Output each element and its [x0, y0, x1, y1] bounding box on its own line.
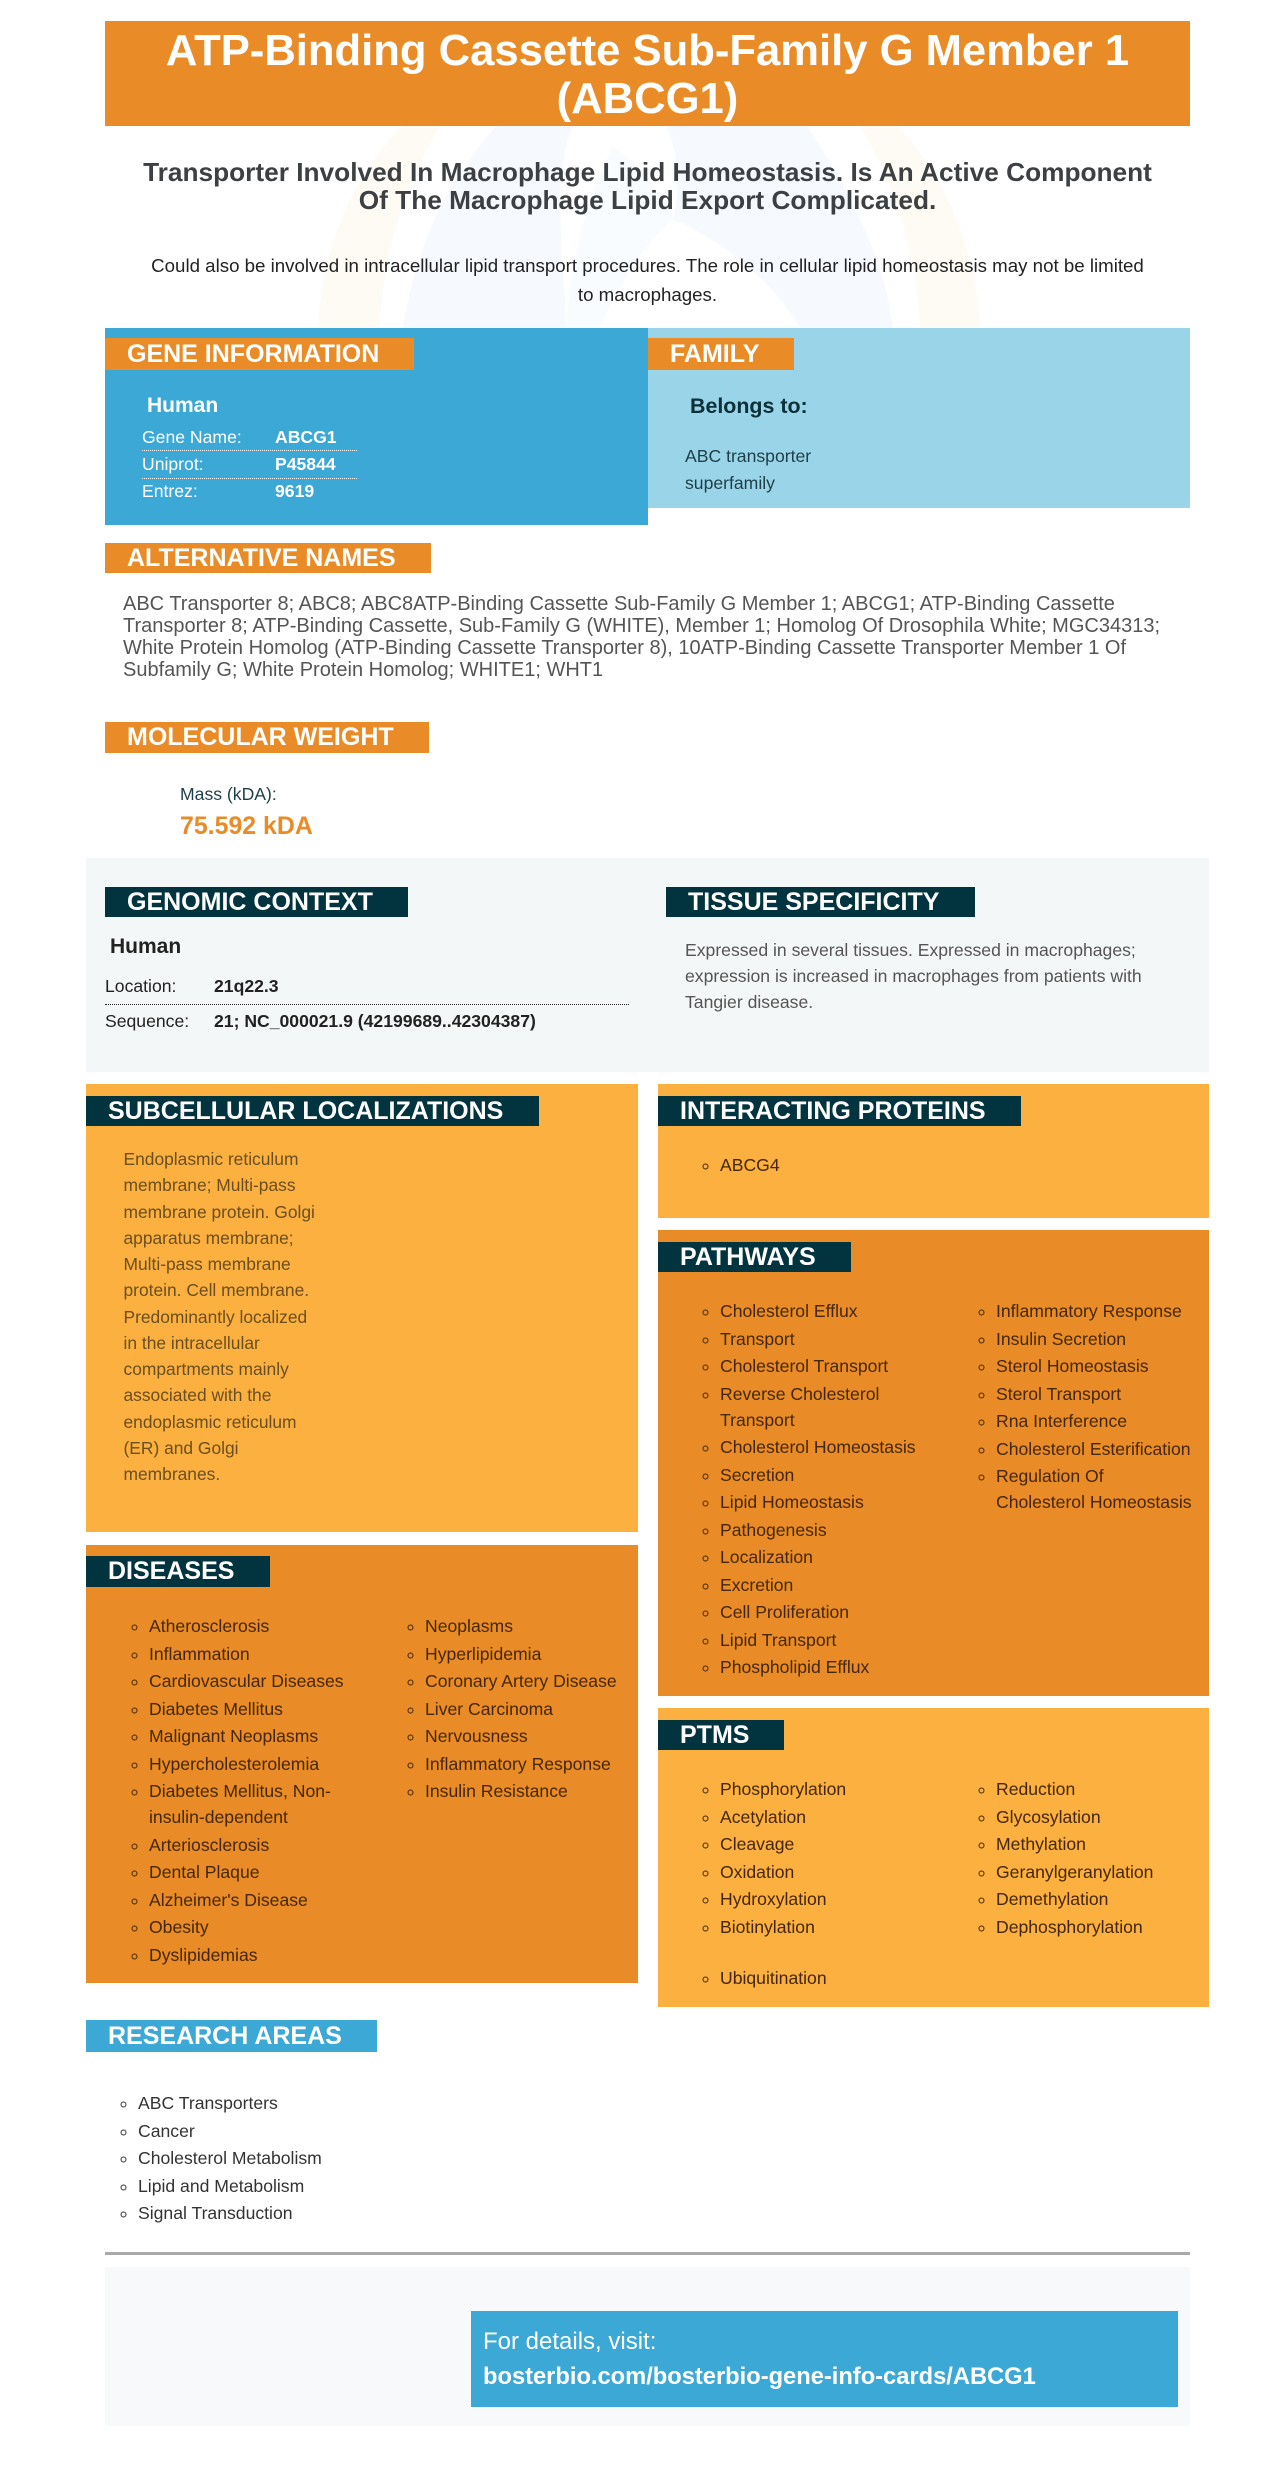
subcellular text: Endoplasmic reticulum — [124, 1149, 298, 1169]
heading: interacting proteins: INTERACTING PROTEINS — [680, 1097, 986, 1125]
gene table: Uniprot: — [142, 454, 204, 474]
heading: diseases — [86, 1556, 270, 1587]
ptms list column 1: Ubiquitination — [720, 1968, 827, 1988]
pathways list column 2: Sterol Transport — [996, 1384, 1121, 1404]
ptms list column 1: Hydroxylation — [720, 1889, 827, 1909]
pathways list column 1: Cholesterol Efflux — [720, 1301, 858, 1321]
heading: pathways — [658, 1242, 851, 1272]
pathways list column 1: Lipid Homeostasis — [720, 1492, 864, 1512]
ptms list column 2: Demethylation — [996, 1889, 1108, 1909]
ptms list column 1: Biotinylation — [720, 1916, 815, 1936]
research areas list: Lipid and Metabolism — [138, 2176, 304, 2196]
heading: research areas: RESEARCH AREAS — [108, 2022, 342, 2050]
ptms list column 1: Phosphorylation — [720, 1779, 846, 1799]
watermark logo — [318, 126, 980, 328]
diseases list column 1: Alzheimer's Disease — [149, 1890, 308, 1910]
species: Human — [110, 935, 181, 958]
subtitle: Transporter Involved In Macrophage Lipid Homeostasis. Is An Active Component — [143, 157, 1152, 187]
subcellular text: protein. Cell membrane. — [124, 1280, 309, 1300]
panel: genomic context and tissue specificity — [86, 858, 1209, 1072]
pathways list column 1: Cholesterol Homeostasis — [720, 1437, 916, 1457]
ptms list column 1: Oxidation — [720, 1862, 794, 1882]
family value — [685, 446, 811, 493]
panel: interacting proteins — [658, 1084, 1209, 1218]
pathways list column 1: Cell Proliferation — [720, 1602, 849, 1622]
pathways list column 2: Inflammatory Response — [996, 1301, 1182, 1321]
interacting list: ABCG4 — [720, 1155, 780, 1175]
heading: gene information: GENE INFORMATION — [127, 340, 379, 368]
alternative names text — [123, 593, 1160, 681]
mass value: 75.592 kDA — [180, 812, 313, 840]
pathways list column 2: Cholesterol Esterification — [996, 1438, 1191, 1458]
pathways list column 1: Reverse Cholesterol — [720, 1384, 879, 1404]
pathways list column 2: Insulin Secretion — [996, 1328, 1126, 1348]
callout label: For details, visit: — [483, 2328, 656, 2355]
genomic table: Location: — [105, 976, 176, 996]
pathways list column 2: Cholesterol Homeostasis — [996, 1492, 1192, 1512]
subcellular text: membrane protein. Golgi — [124, 1202, 315, 1222]
pathways list column 1 — [702, 1301, 916, 1677]
diseases list column 1: Hypercholesterolemia — [149, 1754, 319, 1774]
pathways list column 1: Transport — [720, 1328, 795, 1348]
pathways list column 2: Sterol Homeostasis — [996, 1356, 1149, 1376]
title — [105, 21, 1190, 126]
heading: pathways: PATHWAYS — [680, 1243, 816, 1271]
diseases list column 2 — [408, 1616, 617, 1801]
heading: ptms: PTMS — [680, 1721, 749, 1749]
heading: alternative names: ALTERNATIVE NAMES — [127, 544, 396, 572]
ptms list column 1 — [702, 1779, 846, 1988]
diseases list column 1: Dyslipidemias — [149, 1945, 258, 1965]
diseases list column 1: insulin-dependent — [149, 1807, 288, 1827]
description: to macrophages. — [578, 284, 717, 304]
alternative names text: Subfamily G; White Protein Homolog; WHITE1; WHT1 — [123, 659, 603, 681]
ptms list column 2: Reduction — [996, 1779, 1075, 1799]
alternative names text: ABC Transporter 8; ABC8; ABC8ATP-Binding Cassette Sub-Family G Member 1; ABCG1; ATP-Binding Cassette — [123, 593, 1115, 615]
diseases list column 1: Dental Plaque — [149, 1862, 260, 1882]
ptms list column 2: Geranylgeranylation — [996, 1862, 1153, 1882]
diseases list column 2: Hyperlipidemia — [425, 1644, 541, 1664]
panel: gene information — [105, 328, 648, 525]
gene table — [142, 427, 357, 501]
subcellular text: compartments mainly — [124, 1359, 289, 1379]
description — [151, 255, 1144, 305]
pathways list column 1: Localization — [720, 1547, 813, 1567]
heading: family — [648, 338, 794, 370]
gene table: Gene Name: — [142, 427, 242, 447]
ptms list column 1: Cleavage — [720, 1834, 794, 1854]
pathways list column 2 — [978, 1301, 1192, 1512]
tissue text: expression is increased in macrophages from patients with — [685, 966, 1142, 986]
research areas list: ABC Transporters — [138, 2093, 278, 2113]
panel: family — [648, 328, 1190, 508]
subcellular text: apparatus membrane; — [124, 1228, 294, 1248]
heading: subcellular: SUBCELLULAR LOCALIZATIONS — [108, 1097, 503, 1125]
pathways list column 1: Secretion — [720, 1465, 794, 1485]
diseases list column 1: Atherosclerosis — [149, 1616, 269, 1636]
genomic table: 21; NC_000021.9 (42199689..42304387) — [214, 1011, 536, 1031]
diseases list column 2: Liver Carcinoma — [425, 1698, 553, 1718]
pathways list column 2: Rna Interference — [996, 1411, 1127, 1431]
tissue text: Expressed in several tissues. Expressed in macrophages; — [685, 940, 1136, 960]
diseases list column 1: Diabetes Mellitus, Non- — [149, 1781, 331, 1801]
panel: footer — [105, 2267, 1190, 2426]
ptms list column 1: Acetylation — [720, 1806, 806, 1826]
pathways list column 2: Regulation Of — [996, 1466, 1104, 1486]
gene table: 9619 — [275, 481, 314, 501]
species: Human — [147, 394, 218, 417]
diseases list column 2: Insulin Resistance — [425, 1781, 568, 1801]
heading: molecular weight: MOLECULAR WEIGHT — [127, 723, 394, 751]
diseases list column 2: Inflammatory Response — [425, 1754, 611, 1774]
heading: genomic context: GENOMIC CONTEXT — [127, 888, 373, 916]
title: (ABCG1) — [557, 74, 738, 122]
family value: ABC transporter — [685, 446, 811, 466]
diseases list column 2: Coronary Artery Disease — [425, 1671, 617, 1691]
ptms list column 2: Glycosylation — [996, 1806, 1101, 1826]
description: Could also be involved in intracellular lipid transport procedures. The role in cellular lipid homeostasis may not be limited — [151, 255, 1144, 276]
diseases list column 1 — [132, 1616, 344, 1965]
pathways list column 1: Pathogenesis — [720, 1520, 827, 1540]
family value: superfamily — [685, 473, 775, 493]
belongs to: Belongs to: — [690, 394, 808, 418]
pathways list column 1: Cholesterol Transport — [720, 1356, 888, 1376]
alternative names text: White Protein Homolog (ATP-Binding Cassette Transporter 8), 10ATP-Binding Cassette Transporter Member 1 Of — [123, 637, 1126, 659]
tissue text — [685, 940, 1142, 1012]
heading: family: FAMILY — [670, 340, 759, 368]
diseases list column 1: Malignant Neoplasms — [149, 1726, 318, 1746]
research areas list: Signal Transduction — [138, 2203, 293, 2223]
subcellular text: membranes. — [124, 1464, 220, 1484]
pathways list column 1: Excretion — [720, 1575, 793, 1595]
research areas list: Cholesterol Metabolism — [138, 2148, 322, 2168]
alternative names text: Transporter 8; ATP-Binding Cassette, Sub-Family G (WHITE), Member 1; Homolog Of Drosophila White; MGC34313; — [123, 615, 1160, 637]
subcellular text: associated with the — [124, 1385, 271, 1405]
callout url: bosterbio.com/bosterbio-gene-info-cards/ABCG1 — [483, 2364, 1036, 2390]
title: ATP-Binding Cassette Sub-Family G Member 1 — [166, 26, 1129, 74]
heading: diseases: DISEASES — [108, 1557, 234, 1585]
panel: pathways — [658, 1230, 1209, 1696]
pathways list column 1: Phospholipid Efflux — [720, 1657, 869, 1677]
panel: diseases — [86, 1545, 638, 1983]
genomic table: Sequence: — [105, 1011, 189, 1031]
subcellular text: Predominantly localized — [124, 1306, 307, 1326]
gene table: P45844 — [275, 454, 336, 474]
callout: details link — [471, 2311, 1178, 2407]
diseases list column 1: Diabetes Mellitus — [149, 1698, 283, 1718]
subcellular text: in the intracellular — [124, 1333, 260, 1353]
subcellular text: Multi-pass membrane — [124, 1254, 291, 1274]
research areas list — [120, 2093, 322, 2223]
subtitle — [143, 157, 1152, 215]
ptms list column 2: Dephosphorylation — [996, 1916, 1143, 1936]
diseases list column 1: Cardiovascular Diseases — [149, 1671, 344, 1691]
subcellular text: membrane; Multi-pass — [124, 1175, 296, 1195]
subcellular text — [124, 1149, 315, 1484]
genomic table — [105, 976, 629, 1031]
tissue text: Tangier disease. — [685, 992, 813, 1012]
ptms list column 2: Methylation — [996, 1834, 1086, 1854]
diseases list column 2: Nervousness — [425, 1726, 528, 1746]
heading: tissue specificity: TISSUE SPECIFICITY — [688, 888, 939, 916]
gene table: ABCG1 — [275, 427, 337, 447]
subtitle: Of The Macrophage Lipid Export Complicated. — [359, 185, 936, 215]
research areas list: Cancer — [138, 2120, 195, 2140]
pathways list column 1: Lipid Transport — [720, 1630, 836, 1650]
diseases list column 2: Neoplasms — [425, 1616, 513, 1636]
subcellular text: endoplasmic reticulum — [124, 1412, 297, 1432]
gene table: Entrez: — [142, 481, 198, 501]
genomic table: 21q22.3 — [214, 976, 279, 996]
diseases list column 1: Arteriosclerosis — [149, 1835, 269, 1855]
subcellular text: (ER) and Golgi — [124, 1438, 239, 1458]
diseases list column 1: Inflammation — [149, 1644, 250, 1664]
pathways list column 1: Transport — [720, 1410, 795, 1430]
panel: subcellular localizations — [86, 1084, 638, 1532]
panel: ptms — [658, 1708, 1209, 2007]
diseases list column 1: Obesity — [149, 1917, 209, 1937]
mass label: Mass (kDA): — [180, 784, 277, 804]
ptms list column 2 — [978, 1779, 1153, 1936]
heading: ptms — [658, 1720, 784, 1750]
